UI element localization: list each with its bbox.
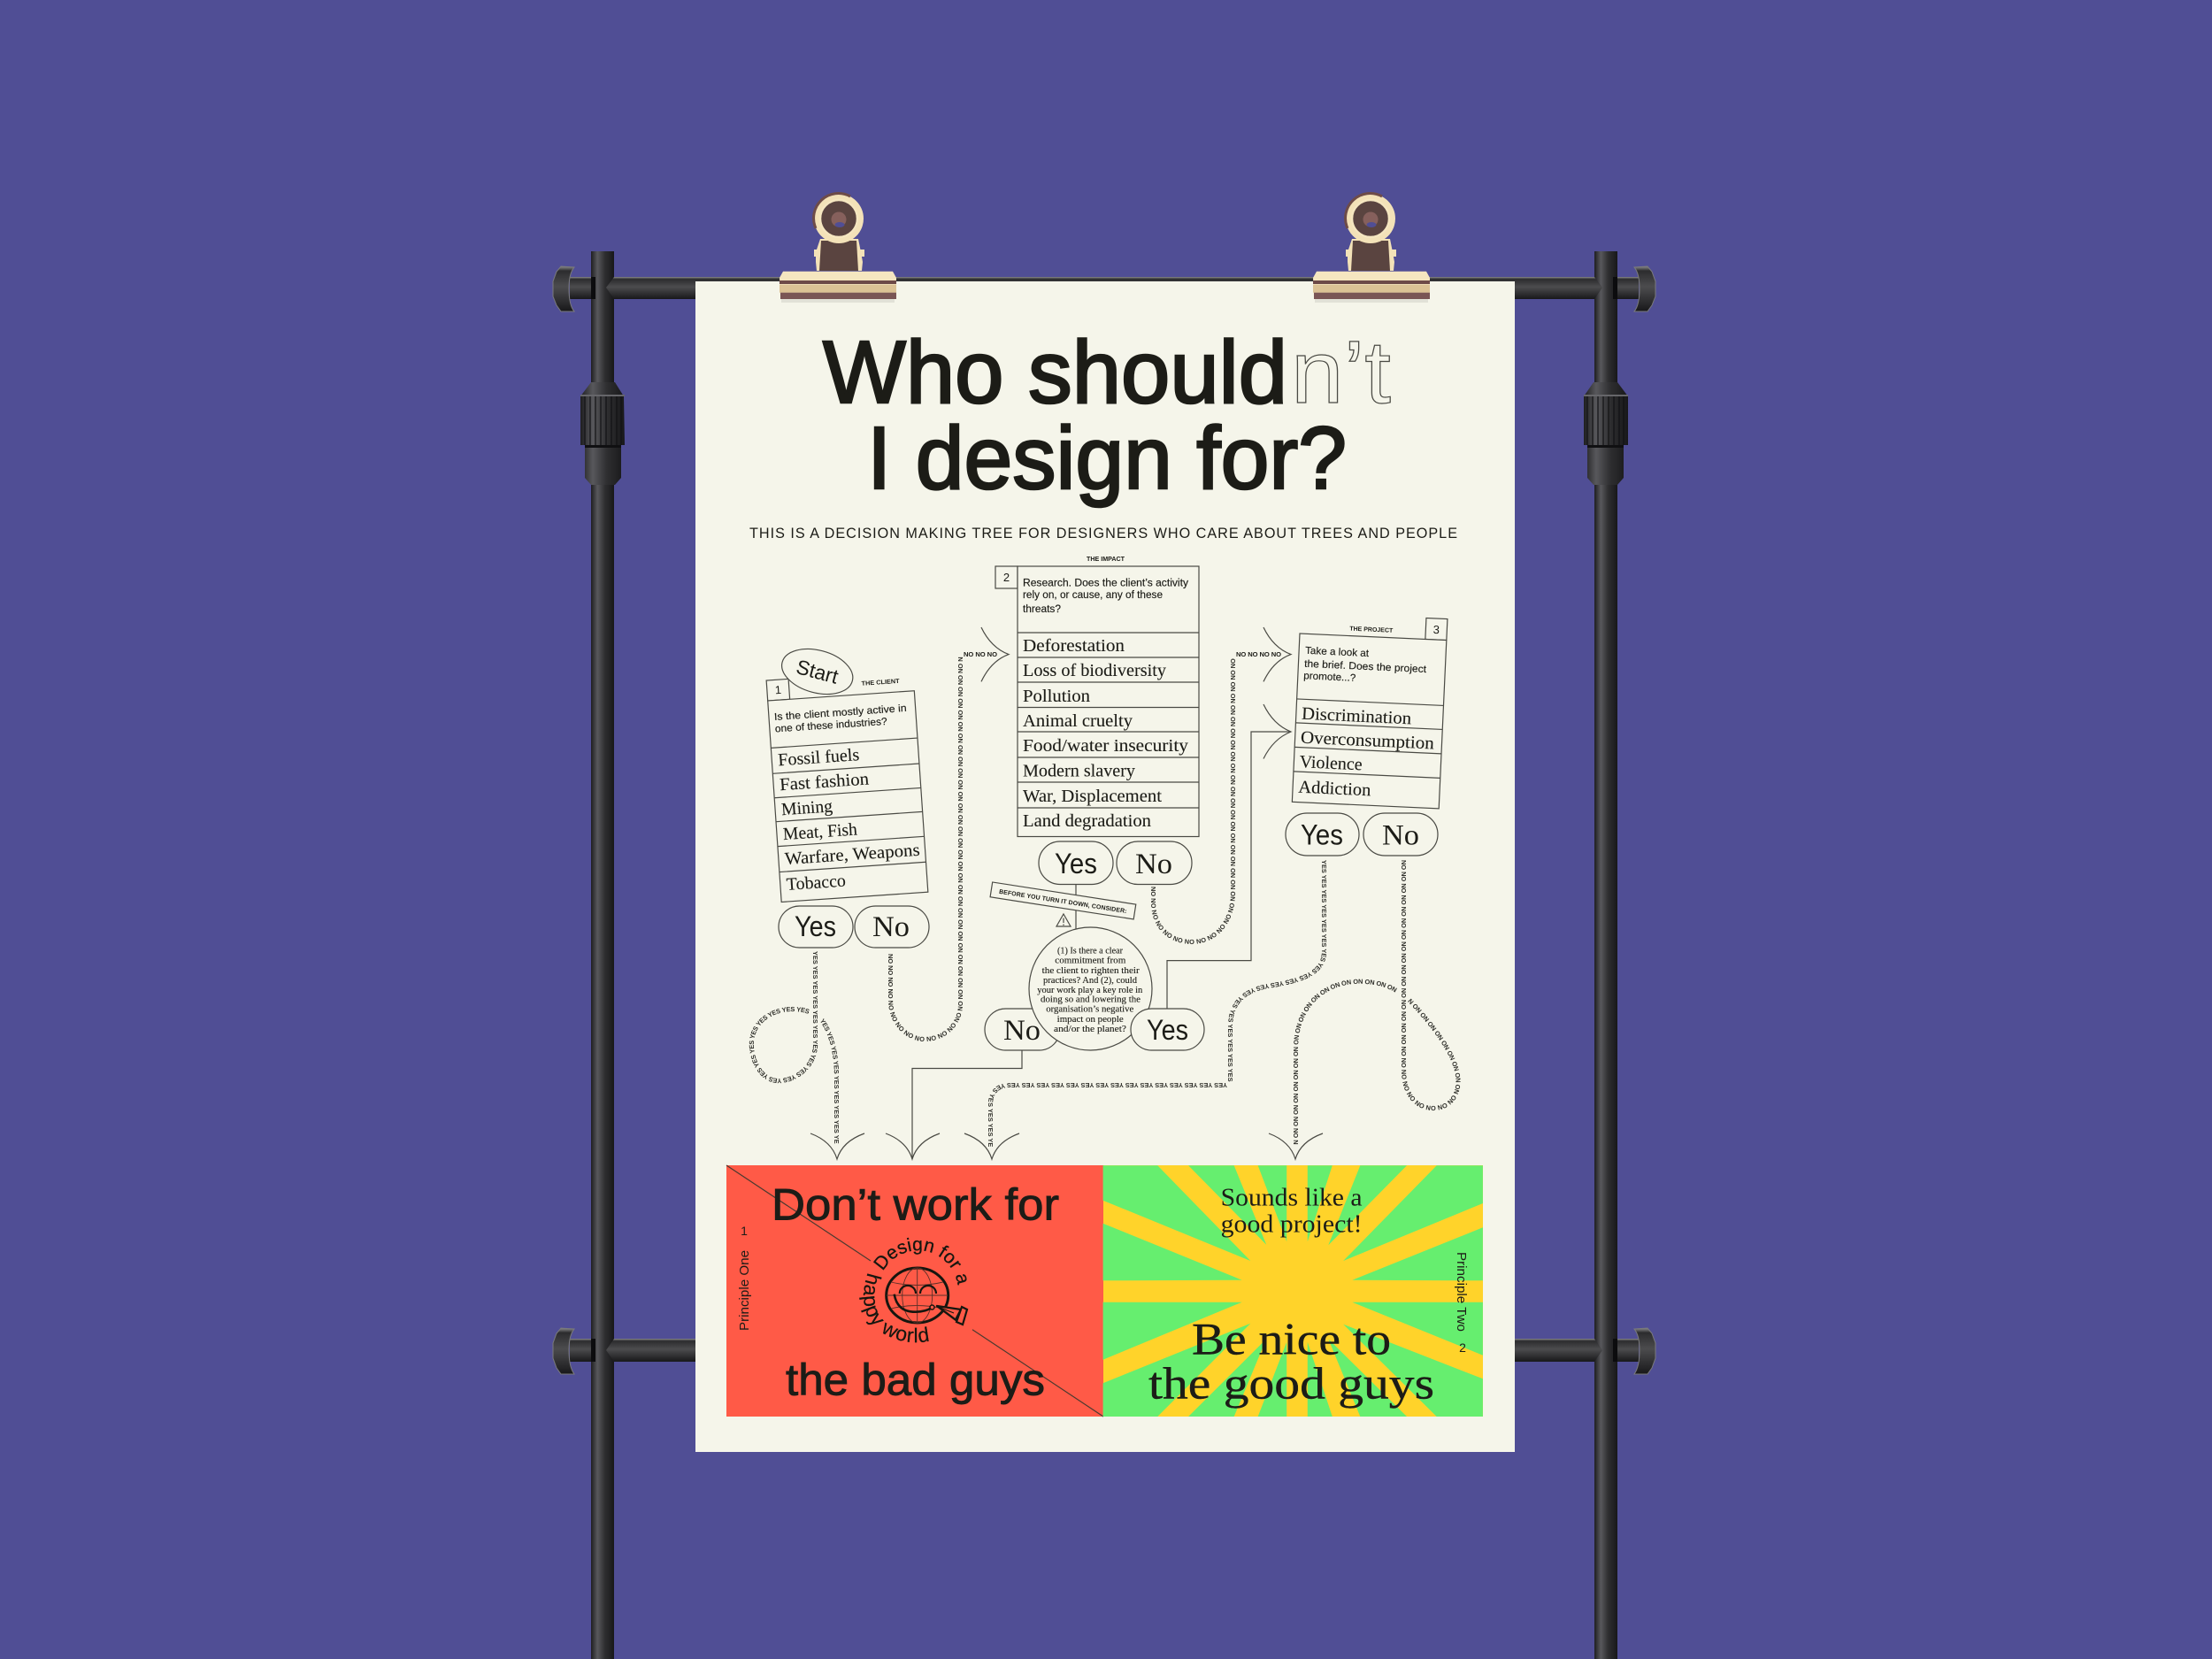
icon: upper right knob (1634, 266, 1655, 311)
word path: panel 1 no route: NO NO NO NO NO NO NO NO NO NO NO NO NO NO NO NO NO NO NO NO NO NO NO NO NO NO NO NO NO NO NO NO NO NO NO NO NO NO NO NO NO NO NO NO NO NO NO NO NO NO NO NO NO NO NO (888, 657, 963, 1041)
panel 2: the impact: Research. Does the client’s activity (1023, 579, 1188, 589)
consideration circle: impact on people (1057, 1015, 1124, 1025)
panel: principle one (red): Principle One (738, 1250, 752, 1331)
panel 2 yes button (1039, 841, 1113, 885)
consideration circle: the client to righten their (1042, 966, 1140, 976)
start oval (777, 641, 858, 702)
panel 2: the impact: Loss of biodiversity (1023, 661, 1166, 680)
panel 2: the impact: War, Displacement (1023, 787, 1162, 806)
panel 2: the impact: Pollution (1023, 687, 1090, 706)
arrow down 1 (810, 1133, 864, 1159)
yes button after consideration (1131, 1009, 1204, 1050)
icon: upper left knob (553, 266, 574, 311)
panel 3: the project: Addiction (1298, 778, 1371, 800)
icon: left bulldog clip (780, 194, 896, 303)
consideration circle: doing so and lowering the (1041, 995, 1141, 1005)
word path: no no no into panel 2: NO NO NO (964, 650, 997, 658)
icon: lower right knob (1634, 1328, 1655, 1374)
panel 2: the impact (995, 557, 1199, 837)
arrow down 2 (886, 1133, 940, 1159)
panel 3: the project: Discrimination (1302, 704, 1412, 728)
word path: panel 1 yes loop: YES YES YES YES YES YES YES YES YES YES YES YES YES YES YES YES YES YES YES YES YES YES YES YES YES YES (749, 951, 818, 1083)
panel 3 no button: No (1382, 819, 1419, 851)
logo: design for a happy world: Design for a (873, 1237, 967, 1286)
panel: principle one (red): 1 (741, 1224, 748, 1238)
arrow down 3 (964, 1133, 1019, 1159)
title (823, 323, 1391, 508)
word path: no no no no into panel 3: NO NO NO NO (1236, 650, 1281, 658)
word path: panel 2 no route: NO NO NO NO NO NO NO NO NO NO NO NO NO NO NO NO NO NO NO NO NO NO NO NO NO NO NO NO NO NO NO NO NO NO NO NO NO NO NO NO NO NO NO NO (1151, 658, 1235, 945)
icon: warning triangle (1056, 914, 1071, 926)
panel: principle one (red) (726, 1165, 1103, 1417)
panel 2 no button (1117, 841, 1192, 885)
panel 2 yes button: Yes (1055, 848, 1097, 879)
panel 2: the impact: threats? (1023, 604, 1061, 615)
panel 1: the client: Meat, Fish (782, 819, 858, 844)
icon: right bulldog clip (1313, 194, 1430, 303)
yes button after consideration: Yes (1147, 1014, 1188, 1046)
panel 3: the project: promote...? (1303, 671, 1356, 684)
arrow down 4 (1269, 1133, 1323, 1159)
panel 2 stem line (1075, 884, 1077, 929)
panel 2: the impact: THE IMPACT (1087, 557, 1125, 563)
panel 2: the impact: Land degradation (1023, 811, 1151, 831)
word path: panel 3 no descent: NO NO NO NO NO NO NO NO NO NO NO NO NO NO NO NO NO NO NO NO NO NO NO NO NO NO NO NO (1294, 979, 1397, 1145)
logo: design for a happy world (859, 1237, 968, 1343)
panel 1 no button (855, 906, 929, 948)
icon: lower left knob (553, 1328, 574, 1374)
panel 2: the impact: Food/water insecurity (1023, 736, 1188, 756)
logo: design for a happy world: happy world (859, 1273, 929, 1343)
panel: principle two (sunburst): Be nice to (1192, 1316, 1391, 1365)
panel: principle two (sunburst): Principle Two (1454, 1252, 1468, 1332)
stand: lower rod (570, 1339, 1639, 1362)
consideration circle: and/or the planet? (1054, 1025, 1126, 1034)
panel 1 yes button: Yes (795, 910, 836, 942)
no button after consideration: No (1003, 1015, 1041, 1047)
panel 3 no button (1363, 813, 1438, 856)
panel: principle two (sunburst): 2 (1459, 1340, 1466, 1355)
panel 1 no button: No (872, 911, 910, 943)
panel 2: the impact: rely on, or cause, any of these (1023, 590, 1163, 601)
consider banner: BEFORE YOU TURN IT DOWN, CONSIDER: (999, 889, 1127, 915)
subtitle: THIS IS A DECISION MAKING TREE FOR DESIGNERS WHO CARE ABOUT TREES AND PEOPLE (749, 526, 1457, 541)
panel 3 yes button (1286, 813, 1359, 856)
panel 3: the project: Overconsumption (1300, 728, 1434, 754)
word path: panel 1 yes descent: YES YES YES YES YES YES YES YES YES YES YES YES (821, 1018, 839, 1143)
consideration circle: organisation’s negative (1046, 1005, 1134, 1015)
connector: no to principle one (912, 1050, 1022, 1159)
panel 2: the impact: Deforestation (1023, 636, 1125, 656)
word path: panel 3 no loop: NO NO NO NO NO NO NO NO NO NO NO NO NO NO NO NO NO NO NO NO NO NO NO NO NO NO NO NO NO NO NO NO NO NO NO NO (1402, 860, 1461, 1111)
panel: principle one (red): the bad guys (786, 1356, 1045, 1405)
consideration circle: your work play a key role in (1037, 986, 1143, 995)
arrow into panel 3 lower (1263, 704, 1291, 759)
panel: principle two (sunburst): the good guys (1148, 1360, 1434, 1409)
word path: yes route to principle one: YES YES YES YES YES YES YES YES YES YES YES YES YES YES YES YES YES YES YES YES YES (988, 1083, 1227, 1147)
panel 1: the client: Fossil fuels (778, 745, 860, 770)
consideration circle: commitment from (1055, 956, 1125, 966)
panel 1 yes button (779, 906, 853, 948)
panel 3: the project: Take a look at (1305, 646, 1370, 659)
panel 1: the client: Is the client mostly active in (774, 703, 907, 723)
stand: right pole (1584, 251, 1628, 1659)
panel 1: the client: THE CLIENT (861, 679, 901, 687)
panel 3: the project (1292, 612, 1448, 809)
connector: yes to panel 3 (1167, 732, 1291, 1009)
consideration circle (1029, 927, 1152, 1050)
panel 2: the impact: Modern slavery (1023, 761, 1135, 780)
start oval: Start (794, 655, 841, 688)
panel 3: the project: 3 (1432, 623, 1440, 636)
panel 1: the client: Warfare, Weapons (784, 841, 921, 869)
panel 3: the project: the brief. Does the project (1304, 659, 1427, 675)
title: Who should (823, 323, 1287, 422)
consideration circle: practices? And (2), could (1043, 976, 1138, 986)
panel 1: the client: Tobacco (786, 872, 846, 895)
arrow into panel 2 (981, 627, 1009, 681)
panel 3: the project: THE PROJECT (1349, 626, 1394, 634)
consideration circle: (1) Is there a clear (1057, 947, 1123, 956)
panel: principle two (sunburst): good project! (1221, 1211, 1363, 1239)
title: I design for? (867, 409, 1347, 508)
panel 2: the impact: 2 (1003, 571, 1010, 584)
stand: top rod (570, 277, 1639, 299)
consider banner (990, 882, 1136, 919)
panel: principle one (red): Don’t work for (772, 1179, 1059, 1229)
panel 3: the project: Violence (1299, 752, 1363, 774)
arrow into panel 3 upper (1263, 627, 1291, 681)
stand: left pole (580, 251, 625, 1659)
panel 2 no button: No (1135, 849, 1172, 880)
panel 1: the client: Fast fashion (779, 769, 870, 795)
poster paper (695, 281, 1515, 1452)
panel: principle two (sunburst): Sounds like a (1221, 1185, 1363, 1212)
no button after consideration (985, 1009, 1060, 1050)
panel 1: the client (766, 671, 928, 902)
title: n’t (1291, 323, 1391, 422)
word path: panel 3 yes route: YES YES YES YES YES YES YES YES YES YES YES YES YES YES YES YES YES YES YES YES (1228, 860, 1326, 1081)
panel 1: the client: one of these industries? (775, 717, 887, 735)
panel 1: the client: 1 (774, 683, 782, 696)
panel 3 yes button: Yes (1301, 819, 1343, 851)
panel 2: the impact: Animal cruelty (1023, 711, 1133, 731)
panel 1: the client: Mining (780, 796, 833, 819)
panel: principle two (sunburst) (1103, 1165, 1483, 1417)
